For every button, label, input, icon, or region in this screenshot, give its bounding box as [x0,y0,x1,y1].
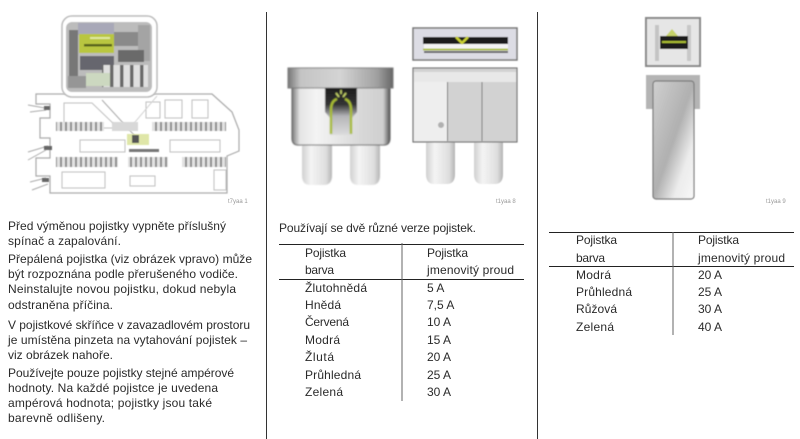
table column: rated current: 25 A [698,285,722,299]
table column: rated current: jmenovitý proud [426,263,514,277]
table column: fuse colour: Pojistka [576,233,617,247]
fuse top view [413,28,517,60]
paragraph: blown fuse: být rozpoznána podle přerušeného vodiče. [8,267,238,281]
diagram code: t7yaa 1 [228,199,248,205]
table column: fuse colour: Zelená [576,320,614,334]
paragraph: tweezers [7,318,250,362]
table column: rated current: 20 A [698,268,722,282]
table column: rated current: 25 A [427,368,451,382]
table column: rated current: jmenovitý proud [697,251,785,265]
table column: rated current: Pojistka [698,233,739,247]
table column: rated current: 15 A [427,333,451,347]
table column: fuse colour [305,246,367,399]
table column: fuse colour: Pojistka [305,246,346,260]
text block: instructions [7,219,252,425]
table column: rated current: Pojistka [427,246,468,260]
panel: fuse box diagram [28,16,248,205]
figure code: t1yaa 8 [496,199,516,205]
panel: narrow fuse views [646,18,786,205]
table: large fuses [549,232,794,335]
table column: fuse colour [576,233,632,334]
fuse box outline drawing [28,94,239,193]
table column: fuse colour: barva [576,251,605,265]
table column: rated current: 40 A [698,320,722,334]
paragraph: same ratings [8,366,234,425]
narrow fuse top view [646,18,700,66]
table column: fuse colour: Žlutohnědá [305,280,367,295]
table column: fuse colour: Modrá [576,268,611,282]
table column: rated current: 20 A [427,350,451,364]
table column: rated current [426,246,514,399]
paragraph: before replacing: spínač a zapalování. [8,234,121,248]
table column: fuse colour: Hnědá [305,298,341,312]
fuse front view [288,68,393,185]
table rules [279,243,524,401]
table column: fuse colour: Růžová [576,302,617,316]
paragraph: before replacing: Před výměnou pojistky vypněte příslušný [8,219,226,233]
magnified photo inset [62,16,157,97]
table column: rated current [697,233,785,334]
paragraph: tweezers: je umístěna pinzeta na vytahování pojistek – [7,333,247,347]
paragraph: tweezers: viz obrázek nahoře. [8,348,113,362]
highlighted fuse [127,134,149,145]
narrow fuse side view [646,75,700,199]
figure code: t1yaa 9 [766,199,786,205]
paragraph: blown fuse: odstraněna příčina. [8,298,113,312]
paragraph: blown fuse [8,252,252,312]
table column: fuse colour: Červená [305,314,349,329]
paragraph: same ratings: Používejte pouze pojistky stejné ampérové [8,366,234,380]
divider [537,12,538,439]
paragraph: blown fuse: Neinstalujte novou pojistku, dokud nebyla [8,282,236,296]
paragraph: same ratings: barevně odlišeny. [8,411,105,425]
table rules [549,232,794,335]
paragraph: same ratings: ampérová hodnota; pojistky jsou také [8,396,212,410]
table column: fuse colour: Žlutá [305,349,334,364]
table column: rated current: 30 A [698,302,722,316]
fuse side view [413,68,517,184]
table column: rated current: 10 A [427,315,451,329]
table column: fuse colour: Průhledná [305,368,361,382]
paragraph: before replacing [8,219,226,248]
table: standard fuses [279,243,524,401]
paragraph: same ratings: hodnoty. Na každé pojistce je uvedena [8,381,218,395]
divider [266,12,267,439]
paragraph: tweezers: V pojistkové skříňce v zavazadlovém prostoru [8,318,250,332]
paragraph: blown fuse: Přepálená pojistka (viz obrázek vpravo) může [8,252,252,266]
panel: blade fuse views [288,28,517,205]
intro sentence: Používají se dvě různé verze pojistek. [279,221,476,235]
fuse rows [42,106,226,182]
table column: rated current: 7,5 A [427,298,454,312]
table column: fuse colour: barva [305,263,334,277]
table column: fuse colour: Průhledná [576,285,632,299]
table column: rated current: 5 A [427,281,444,295]
table column: fuse colour: Modrá [305,333,340,347]
table column: rated current: 30 A [427,385,451,399]
table column: fuse colour: Zelená [305,385,343,399]
